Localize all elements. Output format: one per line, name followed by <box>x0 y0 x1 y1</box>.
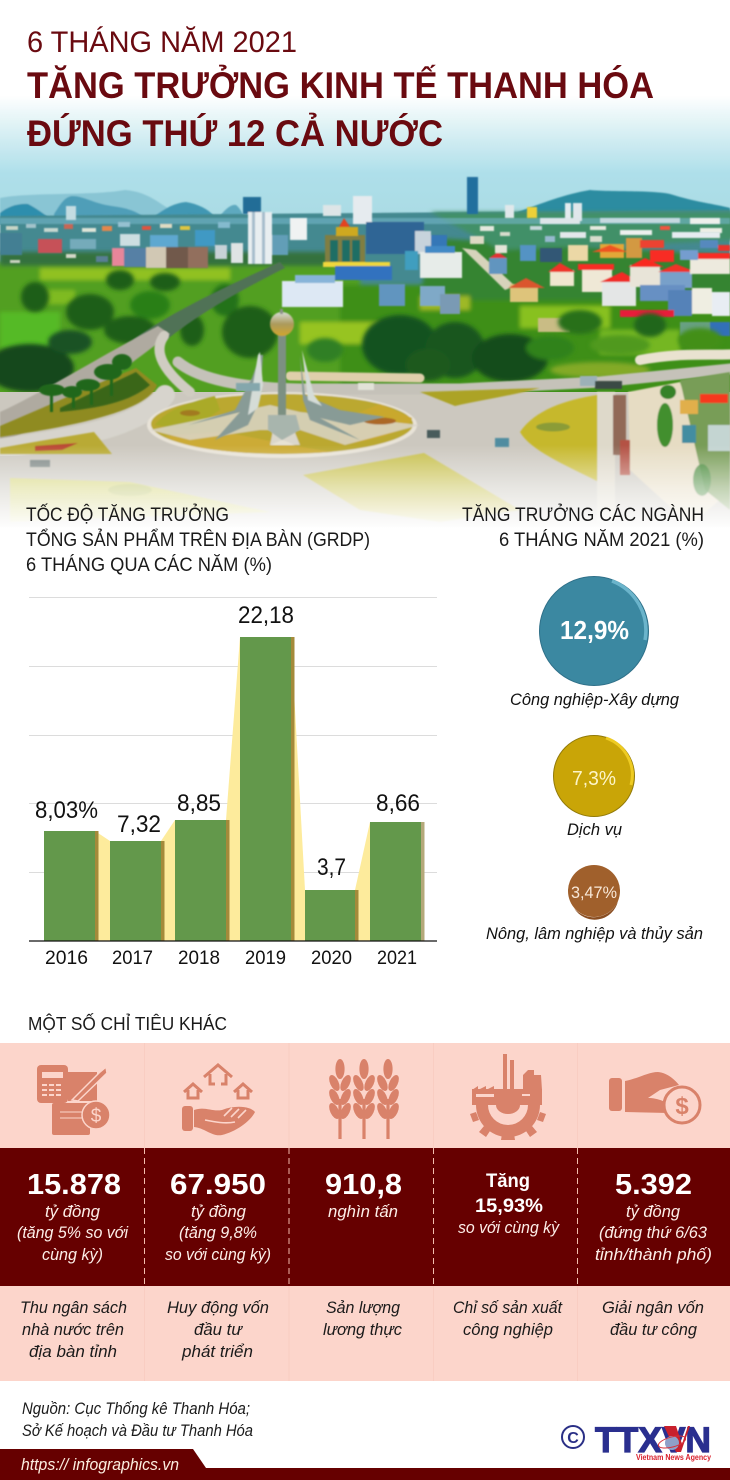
road surface <box>0 392 730 527</box>
bubble: agriculture, forestry and fishery: Nông, lâm nghiệp và thủy sản <box>486 924 703 943</box>
figures band <box>0 1148 730 1286</box>
panel: other indicators <box>0 1043 730 1381</box>
column 1 description: Thu ngân sách <box>20 1298 127 1317</box>
icon: hand with coin: $ <box>675 1093 689 1120</box>
icon: hand with coin <box>609 1072 700 1123</box>
value labels: 7,32 <box>117 811 161 838</box>
column 3 description: lương thực <box>323 1320 402 1339</box>
other indicators heading: MỘT SỐ CHỈ TIÊU KHÁC <box>28 1013 227 1034</box>
connecting yellow ribbons <box>95 637 370 941</box>
grass islands <box>0 388 597 522</box>
column 3 figures <box>325 1169 402 1221</box>
subtitle: 6 THÁNG NĂM 2021 <box>27 26 297 59</box>
column 2 figures: 67.950 <box>170 1169 266 1201</box>
value labels: 8,85 <box>177 790 221 817</box>
bubble: industry and construction: Công nghiệp-Xây dựng <box>510 690 680 709</box>
GRDP chart heading <box>26 504 370 576</box>
left palm island <box>0 368 157 437</box>
bar chart: GRDP growth by year <box>29 598 437 969</box>
vegetation base <box>0 212 730 412</box>
photo fade into white <box>0 445 730 530</box>
column 2 figures <box>165 1169 271 1264</box>
photo: aerial view of Thanh Hoa city and roundabout monument <box>0 95 730 530</box>
column 4 figures: 15,93% <box>475 1196 543 1217</box>
source note: Nguồn: Cục Thống kê Thanh Hóa; <box>22 1399 250 1418</box>
logo: TTXVN Vietnam News Agency: TTXVN <box>595 1421 711 1460</box>
column 2 description <box>167 1298 269 1361</box>
bar shadows <box>95 637 424 941</box>
sandy verge <box>290 376 420 378</box>
column 3 description: Sản lượng <box>326 1298 401 1317</box>
column 2 description: đầu tư <box>194 1320 243 1339</box>
column 2 figures: (tăng 9,8% <box>179 1223 257 1242</box>
column 2 description: phát triển <box>181 1342 253 1361</box>
year labels: 2017 <box>112 948 153 969</box>
column 3 description <box>323 1298 402 1339</box>
column 5 figures: tỉnh/thành phố) <box>595 1245 712 1264</box>
year labels: 2019 <box>245 948 286 969</box>
column 5 figures <box>595 1169 712 1264</box>
value labels: 8,66 <box>376 790 420 817</box>
icon: calculator, pen and coin: $ <box>91 1106 102 1127</box>
value labels: 8,03% <box>35 797 98 824</box>
trees <box>0 270 722 392</box>
column 4 figures: Tăng <box>486 1171 530 1192</box>
year labels: 2018 <box>178 948 220 969</box>
source note: Sở Kế hoạch và Đầu tư Thanh Hóa <box>22 1421 253 1440</box>
footer bar <box>0 1449 730 1480</box>
column 3 figures: nghìn tấn <box>328 1202 398 1221</box>
column 1 description: địa bàn tỉnh <box>29 1342 117 1361</box>
column 5 figures: tỷ đồng <box>626 1202 681 1221</box>
palm trees <box>39 354 132 412</box>
logo: TTXVN Vietnam News Agency: Vietnam News Agency <box>636 1452 711 1462</box>
vehicles <box>30 376 622 467</box>
viaduct road <box>133 262 285 345</box>
distant rooftops <box>0 218 730 263</box>
year labels: 2021 <box>377 948 417 969</box>
left lower carriageway <box>0 395 165 450</box>
icon: calculator, pen and coin <box>37 1065 110 1135</box>
GRDP chart heading: TỔNG SẢN PHẨM TRÊN ĐỊA BÀN (GRDP) <box>26 529 370 551</box>
icon band <box>0 1043 730 1148</box>
value labels: 22,18 <box>238 602 294 629</box>
copyright mark: C <box>567 1430 579 1447</box>
column 4 figures <box>458 1171 560 1237</box>
column 1 figures: tỷ đồng <box>45 1202 101 1221</box>
column 1 figures: (tăng 5% so với <box>17 1223 129 1242</box>
sector growth heading: 6 THÁNG NĂM 2021 (%) <box>499 530 704 551</box>
left diagonal road <box>0 326 170 444</box>
year labels: 2020 <box>311 948 352 969</box>
source note <box>22 1399 253 1440</box>
column 2 figures: tỷ đồng <box>191 1202 247 1221</box>
column 1 figures: cùng kỳ) <box>42 1245 103 1264</box>
column 5 description <box>602 1298 704 1339</box>
link road to the roundabout <box>159 336 190 392</box>
GRDP chart heading: 6 THÁNG QUA CÁC NĂM (%) <box>26 555 272 576</box>
sector growth heading <box>462 504 704 551</box>
right roadside strip <box>597 372 730 525</box>
bars <box>44 637 421 941</box>
column 4 description: Chỉ số sản xuất <box>453 1298 563 1317</box>
icon: hand holding houses <box>182 1065 255 1135</box>
icon: wheat stalks <box>327 1059 401 1139</box>
column 2 figures: so với cùng kỳ) <box>165 1245 271 1264</box>
bubble: services: 7,3% <box>572 768 616 790</box>
bubble: agriculture, forestry and fishery: 3,47% <box>571 883 617 902</box>
column 5 description: Giải ngân vốn <box>602 1298 704 1317</box>
distant mountains <box>0 190 730 226</box>
sky <box>0 95 730 225</box>
column 5 description: đầu tư công <box>610 1320 698 1339</box>
column 3 figures: 910,8 <box>325 1169 402 1201</box>
monument <box>188 309 385 445</box>
column 1 figures: 15.878 <box>27 1169 121 1201</box>
copyright mark <box>562 1426 584 1448</box>
city buildings <box>0 177 730 336</box>
icon: factory on a gear <box>470 1054 546 1140</box>
bubble: industry and construction <box>510 576 680 709</box>
roundabout island <box>147 392 420 458</box>
GRDP chart heading: TỐC ĐỘ TĂNG TRƯỞNG <box>26 504 229 526</box>
bubble: industry and construction: 12,9% <box>560 615 629 645</box>
baseline <box>29 940 437 942</box>
website url: https:// infographics.vn <box>21 1455 179 1474</box>
sector growth heading: TĂNG TRƯỞNG CÁC NGÀNH <box>462 504 704 526</box>
header titles <box>27 26 654 154</box>
column 4 figures: so với cùng kỳ <box>458 1218 560 1237</box>
bubble: services <box>554 736 634 839</box>
year labels <box>45 948 417 969</box>
main title line 2: ĐỨNG THỨ 12 CẢ NƯỚC <box>27 112 443 154</box>
value labels: 3,7 <box>317 854 346 881</box>
column 5 figures: 5.392 <box>615 1169 692 1201</box>
column 1 figures <box>17 1169 129 1264</box>
bubble: agriculture, forestry and fishery <box>486 865 703 943</box>
bubble: services: Dịch vụ <box>567 820 623 839</box>
city base <box>0 210 730 300</box>
column 2 description: Huy động vốn <box>167 1298 269 1317</box>
year labels: 2016 <box>45 948 88 969</box>
column 1 description: nhà nước trên <box>22 1320 124 1339</box>
upper ring road <box>178 362 730 389</box>
main title line 1: TĂNG TRƯỞNG KINH TẾ THANH HÓA <box>27 64 654 106</box>
description band <box>0 1286 730 1381</box>
column 4 description: công nghiệp <box>463 1320 553 1339</box>
column 4 description <box>453 1298 563 1339</box>
column 5 figures: (đứng thứ 6/63 <box>599 1223 708 1242</box>
value labels <box>35 602 420 881</box>
column 1 description <box>20 1298 127 1361</box>
